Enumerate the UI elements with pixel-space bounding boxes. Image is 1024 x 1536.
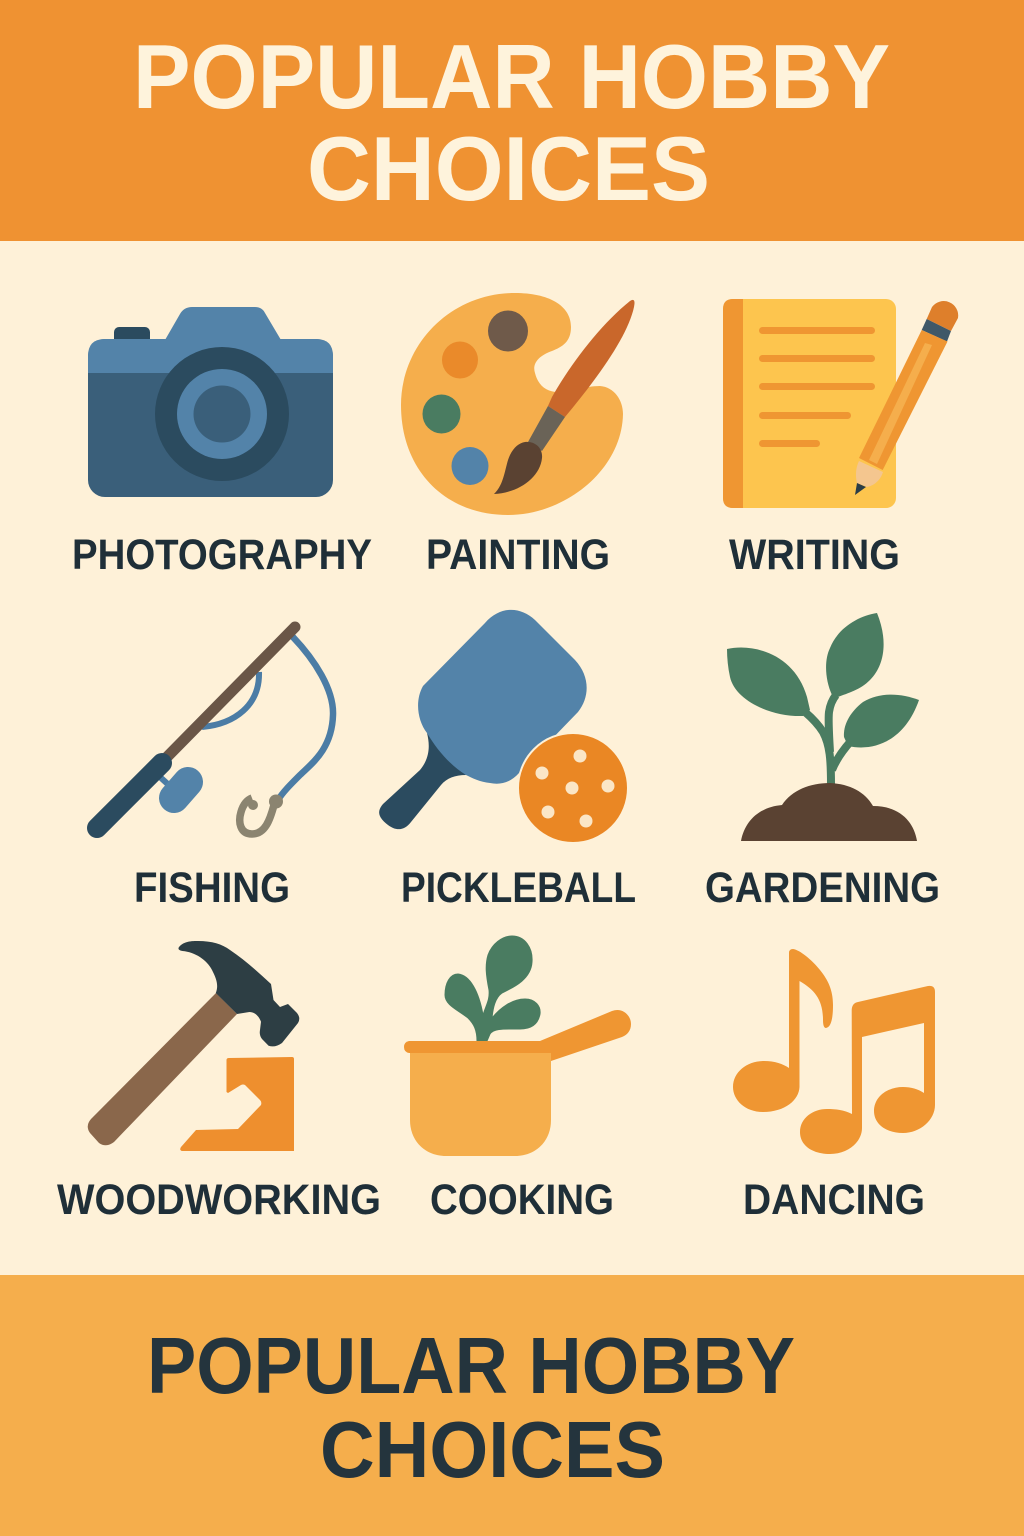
panel: painting <box>401 293 634 579</box>
label: writing: WRITING <box>729 531 900 579</box>
label: dancing: DANCING <box>743 1176 925 1224</box>
panel: photography <box>72 307 372 579</box>
footer title: CHOICES <box>320 1405 665 1494</box>
label: cooking: COOKING <box>430 1176 614 1224</box>
panel: gardening <box>705 613 940 912</box>
icon: notebook and pencil <box>723 299 958 508</box>
icon: plant <box>445 936 540 1041</box>
footer title: POPULAR HOBBY <box>147 1321 795 1410</box>
panel: fishing <box>97 627 333 912</box>
icon: cooking pot <box>404 1010 631 1156</box>
panel: writing <box>723 299 958 579</box>
icon: pickleball ball <box>518 733 628 843</box>
icon: fishing rod <box>97 627 333 834</box>
label: woodworking: WOODWORKING <box>57 1176 381 1224</box>
label: gardening: GARDENING <box>705 864 940 912</box>
label: painting: PAINTING <box>426 531 610 579</box>
icon: hammer <box>88 941 299 1145</box>
icon: camera <box>88 307 333 497</box>
label: fishing: FISHING <box>134 864 290 912</box>
icon: paddle <box>379 610 587 829</box>
label: pickleball: PICKLEBALL <box>401 864 636 912</box>
title <box>133 27 890 220</box>
icon: wood block <box>180 1057 294 1151</box>
footer banner <box>0 1275 1024 1536</box>
label: photography: PHOTOGRAPHY <box>72 531 372 579</box>
icon: music notes <box>733 949 935 1154</box>
panel: woodworking <box>57 941 381 1224</box>
icon: palette and brush <box>401 293 634 515</box>
panel: cooking <box>404 936 631 1224</box>
panel: dancing <box>733 949 935 1224</box>
title: POPULAR HOBBY <box>133 27 890 128</box>
panel: pickleball <box>379 610 636 912</box>
header banner <box>0 0 1024 241</box>
icon: seedling <box>727 613 919 841</box>
footer title <box>147 1321 795 1494</box>
title: CHOICES <box>307 119 710 220</box>
